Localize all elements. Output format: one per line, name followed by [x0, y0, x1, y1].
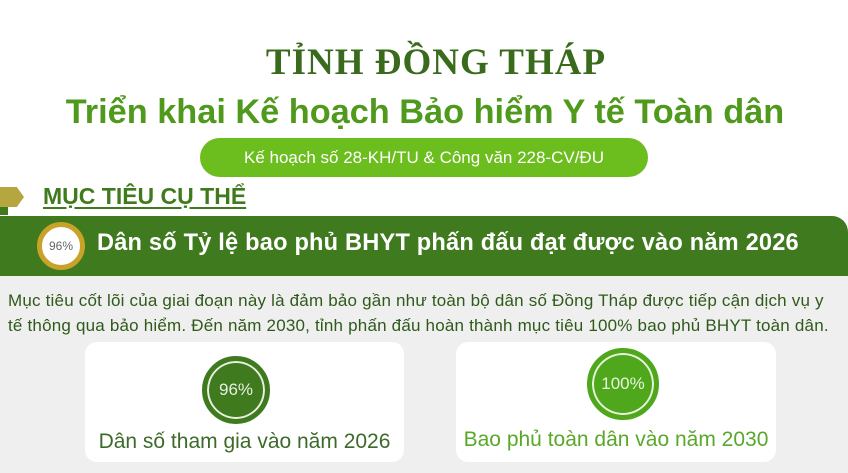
- banner heading: Dân số Tỷ lệ bao phủ BHYT phấn đấu đạt được vào năm 2026: [97, 230, 799, 256]
- icon: 96% gauge: 96%: [49, 239, 73, 253]
- card: 100% 2030: [456, 342, 776, 462]
- paragraph: Mục tiêu cốt lõi của giai đoạn này là đảm bảo gần như toàn bộ dân số Đồng Tháp được tiếp cận dịch vụ y: [8, 291, 824, 310]
- card: 96% 2026: [85, 342, 404, 462]
- subtitle: Triển khai Kế hoạch Bảo hiểm Y tế Toàn dân: [66, 93, 784, 131]
- caption: Dân số tham gia vào năm 2026: [99, 430, 390, 453]
- paragraph: [8, 291, 829, 335]
- pill: document reference: Kế hoạch số 28-KH/TU & Công văn 228-CV/ĐU: [244, 148, 604, 167]
- gauge 96%: 96%: [219, 380, 253, 399]
- icon: 96% gauge: [37, 222, 85, 270]
- title: TỈNH ĐỒNG THÁP: [266, 42, 606, 83]
- gauge 96%: [202, 356, 270, 424]
- gauge 100%: 100%: [601, 374, 645, 393]
- gauge 100%: [587, 348, 659, 420]
- banner: [0, 216, 848, 276]
- pill: document reference: [200, 138, 648, 177]
- section heading: MỤC TIÊU CỤ THỂ: [43, 183, 246, 209]
- caption: Bao phủ toàn dân vào năm 2030: [464, 428, 768, 451]
- gray lower background: [0, 276, 848, 473]
- paragraph: tế thông qua bảo hiểm. Đến năm 2030, tỉnh phấn đấu hoàn thành mục tiêu 100% bao phủ BHYT toàn dân.: [8, 316, 829, 335]
- icon: section marker: [0, 187, 24, 215]
